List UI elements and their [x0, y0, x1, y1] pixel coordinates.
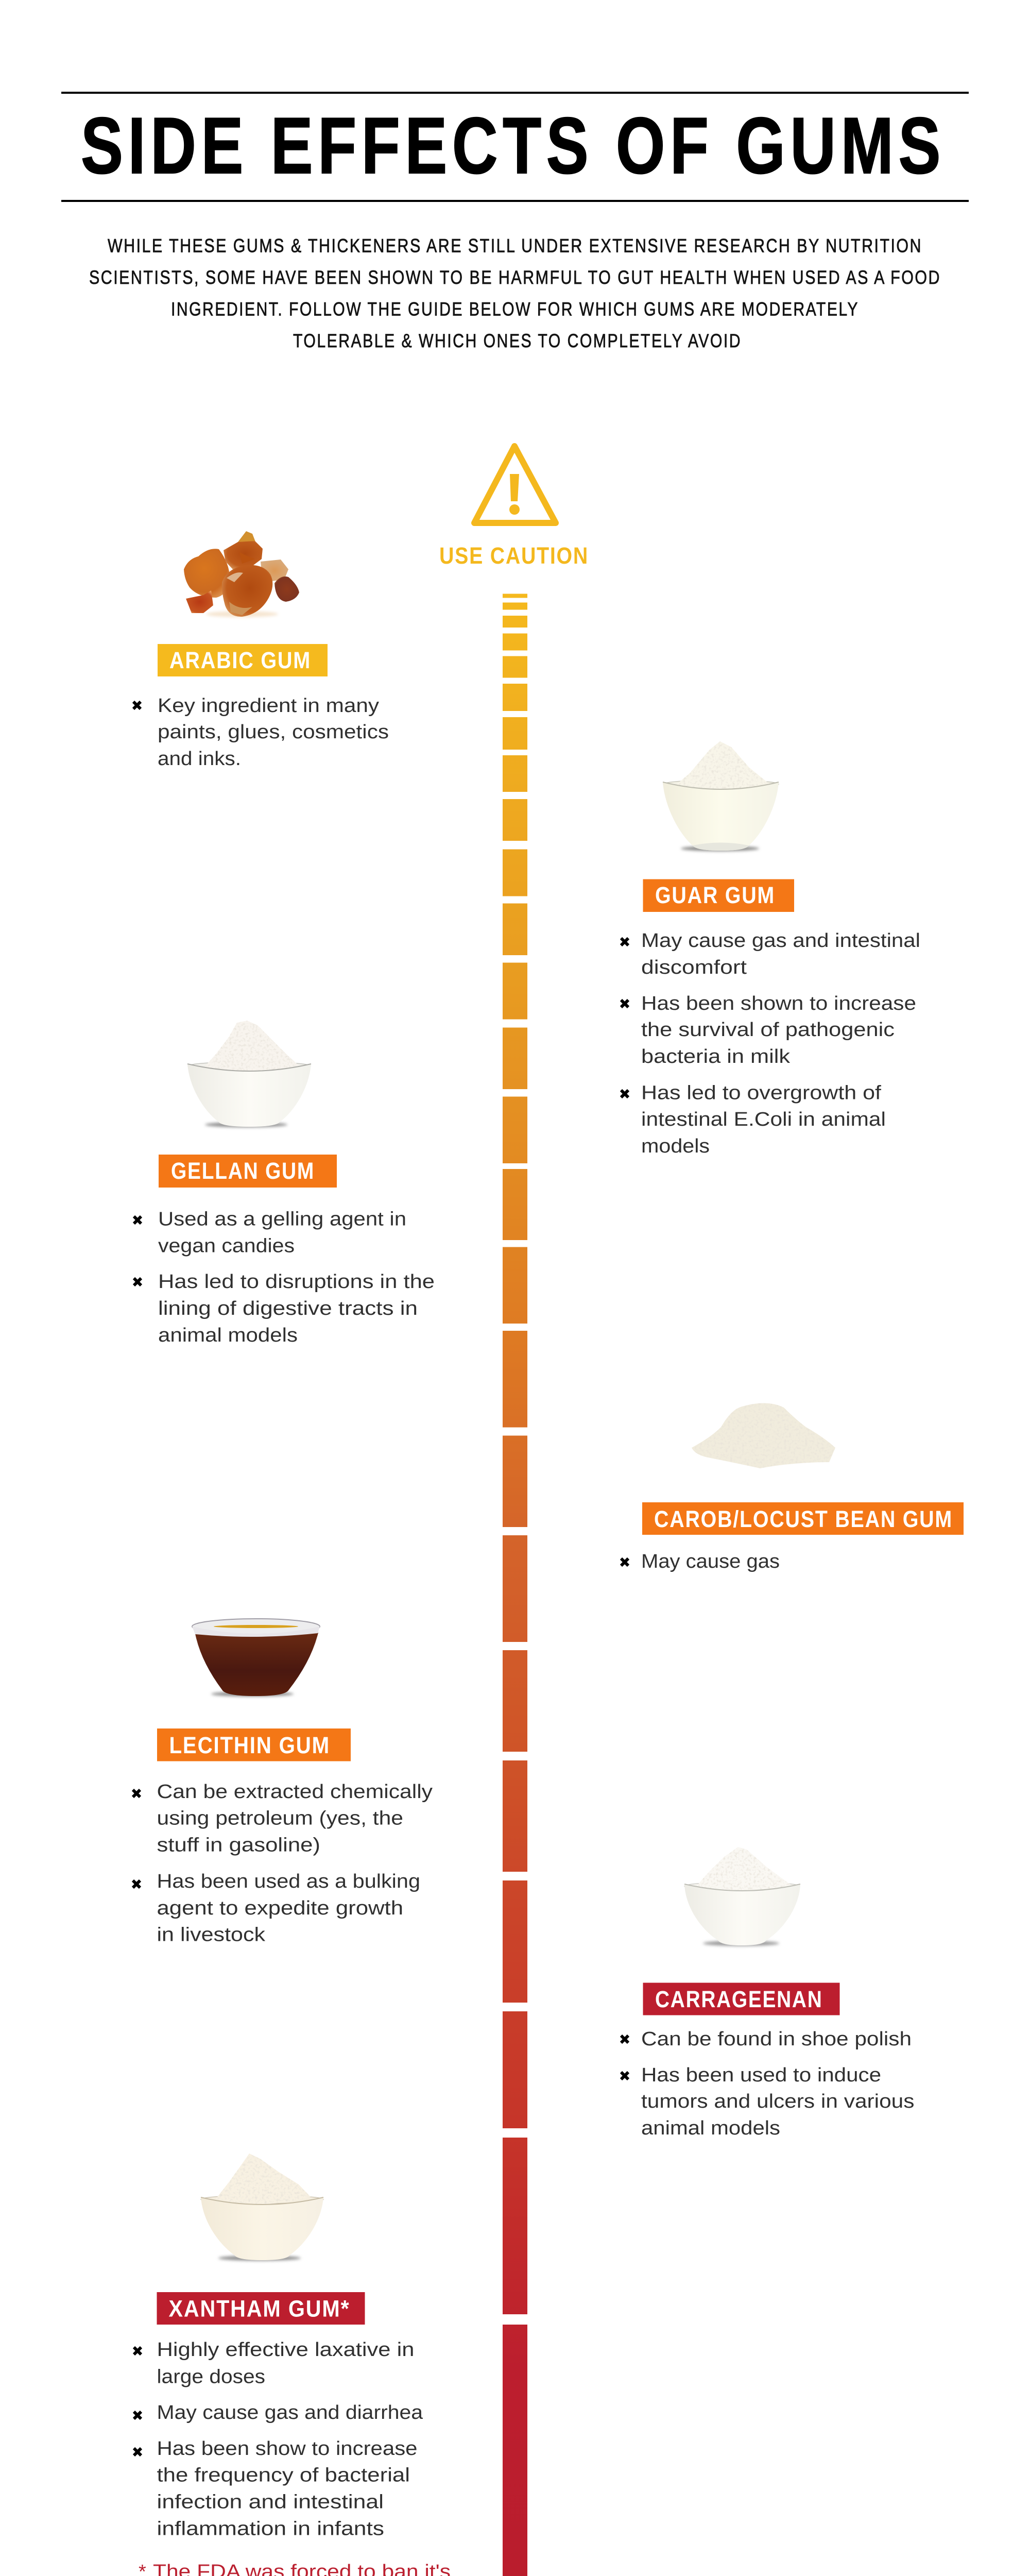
panel: carob gum	[621, 1403, 964, 1572]
bullet list: guar gum: models	[641, 1136, 710, 1157]
bullet list: guar gum: discomfort	[641, 957, 747, 978]
bullet list: gellan gum: animal models	[158, 1325, 298, 1346]
image: arabic gum chunks	[184, 531, 299, 617]
image: carob powder pile	[692, 1403, 835, 1468]
bullet list: lecithin gum: stuff in gasoline)	[157, 1834, 320, 1856]
bullet list: lecithin gum: agent to expedite growth	[157, 1897, 403, 1919]
bullet list: xantham gum: inflammation in infants	[157, 2518, 384, 2540]
label: xantham gum: XANTHAM GUM*	[169, 2296, 350, 2321]
panel: lecithin gum	[133, 1619, 433, 1945]
bullet list: xantham gum: Highly effective laxative in	[157, 2339, 414, 2361]
bullet list: gellan gum: lining of digestive tracts in	[158, 1298, 418, 1319]
bullet list: gellan gum	[134, 1209, 435, 1346]
bullet list: arabic gum: paints, glues, cosmetics	[158, 721, 389, 743]
bullet list: guar gum: Has been shown to increase	[641, 993, 916, 1014]
panel: guar gum	[621, 741, 920, 1157]
label: arabic gum: ARABIC GUM	[169, 647, 311, 673]
bullet list: gellan gum: Has led to disruptions in the	[158, 1271, 435, 1293]
bullet list: xantham gum: large doses	[157, 2366, 265, 2387]
intro text	[89, 235, 941, 351]
bullet list: guar gum: the survival of pathogenic	[641, 1019, 895, 1041]
bullet list: lecithin gum: Can be extracted chemically	[157, 1781, 433, 1803]
bullet list: guar gum: Has led to overgrowth of	[641, 1082, 881, 1104]
bullet list: arabic gum: and inks.	[158, 748, 241, 770]
image: bowl of carrageenan	[684, 1847, 800, 1946]
bullet list: carrageenan: animal models	[641, 2117, 780, 2139]
bullet list: xantham gum: Has been show to increase	[157, 2438, 417, 2460]
label: lecithin gum: LECITHIN GUM	[169, 1732, 330, 1758]
label: guar gum: GUAR GUM	[655, 882, 775, 908]
panel: xantham gum	[134, 2154, 451, 2576]
image: bowl of xantham gum	[201, 2154, 323, 2261]
bullet list: guar gum: intestinal E.Coli in animal	[641, 1109, 886, 1130]
bullet list: arabic gum: Key ingredient in many	[158, 695, 379, 717]
label: carrageenan: CARRAGEENAN	[655, 1986, 823, 2012]
image: bowl of lecithin	[192, 1619, 320, 1697]
bullet list: xantham gum: infection and intestinal	[157, 2492, 384, 2513]
label: carob gum: CAROB/LOCUST BEAN GUM	[654, 1506, 953, 1532]
icon: caution triangle	[474, 446, 556, 523]
image: bowl of gellan gum	[187, 1021, 311, 1127]
bullet list: carrageenan	[621, 2028, 915, 2139]
severity scale bar	[503, 594, 527, 2576]
panel: arabic gum	[133, 531, 389, 770]
bullet list: carrageenan: tumors and ulcers in various	[641, 2091, 915, 2112]
bullet list: gellan gum: Used as a gelling agent in	[158, 1209, 406, 1230]
bullet list: arabic gum	[133, 695, 389, 770]
bullet list: carrageenan: Can be found in shoe polish	[641, 2028, 912, 2050]
bullet list: lecithin gum: using petroleum (yes, the	[157, 1807, 403, 1829]
bullet list: lecithin gum: Has been used as a bulking	[157, 1871, 420, 1892]
bullet list: xantham gum: the frequency of bacterial	[157, 2465, 410, 2486]
intro text: INGREDIENT. FOLLOW THE GUIDE BELOW FOR WHICH GUMS ARE MODERATELY	[171, 299, 859, 319]
bullet list: gellan gum: vegan candies	[158, 1235, 295, 1257]
heading: use caution: USE CAUTION	[439, 543, 589, 569]
bullet list: lecithin gum	[133, 1781, 433, 1945]
bullet list: guar gum: May cause gas and intestinal	[641, 930, 920, 952]
header	[61, 92, 969, 202]
bullet list: xantham gum: May cause gas and diarrhea	[157, 2402, 423, 2424]
intro text: TOLERABLE & WHICH ONES TO COMPLETELY AVOID	[293, 330, 742, 351]
panel: carrageenan	[621, 1847, 915, 2139]
label: gellan gum: GELLAN GUM	[171, 1158, 315, 1184]
bullet list: carrageenan: Has been used to induce	[641, 2064, 881, 2086]
bullet list: carob gum: May cause gas	[641, 1551, 780, 1572]
bullet list: lecithin gum: in livestock	[157, 1924, 266, 1945]
bullet list: xantham gum	[134, 2339, 423, 2540]
image: bowl of guar gum	[663, 741, 779, 851]
panel: gellan gum	[134, 1021, 435, 1346]
bullet list: guar gum	[621, 930, 920, 1157]
bullet list: guar gum: bacteria in milk	[641, 1046, 791, 1067]
